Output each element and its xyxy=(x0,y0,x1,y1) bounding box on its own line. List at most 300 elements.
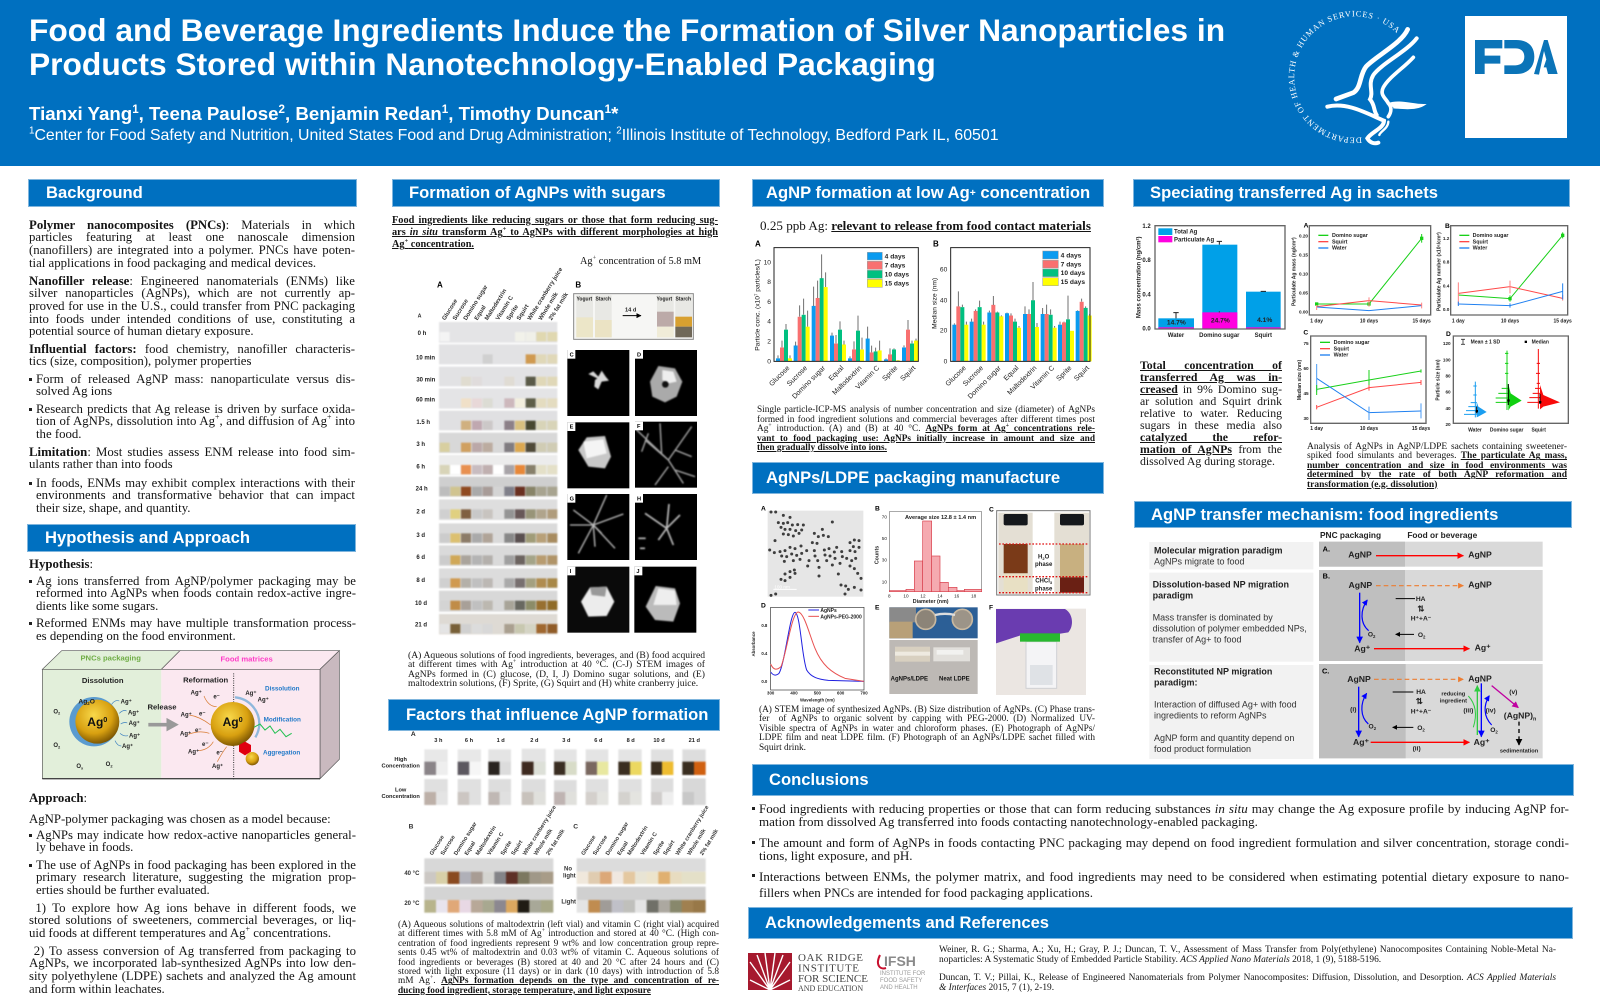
bullet: in foods: In foods, ENMs may exhibit complex interactions with their xyxy=(36,476,355,490)
bullet: conclusion 2: tions, light exposure, and pH. xyxy=(759,848,912,862)
panel F: sachet in gloved hand xyxy=(989,604,1086,695)
panel A labels: 21 d xyxy=(689,738,701,744)
panel A: column labels: White cranberry juice xyxy=(527,266,565,322)
bullet: conclusion 3: Interactions between ENMs, the polymer matrix, and food ingredients may need to be considered when estimating potential dietary exposure to nano- xyxy=(759,868,1569,884)
bar chart: mass concentration: 0.0 xyxy=(1142,326,1151,332)
panel A labels: 6 h xyxy=(465,738,474,744)
text: influential factors xyxy=(29,342,355,368)
figure: factors vial photos xyxy=(381,731,720,914)
text: polymer nanocomposites: particles featuring at least one nanoscale dimension xyxy=(29,230,355,244)
mechanism C: H⁺+A⁻ xyxy=(1411,709,1432,716)
panel B: yogurt and starch vials: Starch xyxy=(676,297,691,303)
panel A labels: 2 d xyxy=(530,738,539,744)
panel headings: Dissolution xyxy=(82,676,124,685)
mechanism C: 2 xyxy=(1374,726,1377,731)
chart A: particle concentration: Domino sugar xyxy=(791,364,828,401)
panel E: film extruder and film photos: AgNPs/LDPE xyxy=(891,677,928,683)
text: total concentration finding: relative to water. Reducing xyxy=(1140,406,1282,420)
caption: LDPE figure: LDPE film and neat LDPE film. (F) Photograph of an AgNPs/LDPE sachet filled with xyxy=(759,733,1095,743)
mechanism C: 2 xyxy=(1495,729,1498,734)
text: total concentration finding: sugars in these media also xyxy=(1140,418,1282,432)
dissolving Ag particle: Ag⁺ xyxy=(128,709,139,716)
icon: FDA logo xyxy=(1465,16,1567,138)
logos: HHS seal and FDA xyxy=(1288,10,1567,146)
text: total concentration finding: ar solution and Squirt drink xyxy=(1140,394,1282,408)
bar chart: mass concentration: Total Ag xyxy=(1174,230,1198,236)
line chart B: particulate Ag number: 0.0 xyxy=(1443,307,1450,312)
wordmark: Oak Ridge Institute: AND EDUCATION xyxy=(798,984,863,993)
heading: Hypothesis and Approach: Hypothesis and Approach xyxy=(45,528,250,547)
line chart C: median size: Water xyxy=(1334,353,1348,359)
STEM image F xyxy=(635,422,697,488)
paradigm B description xyxy=(1149,573,1313,662)
bullet: form of released mass: solved Ag ions xyxy=(36,384,112,398)
mechanism C: HA xyxy=(1416,689,1426,696)
panel headings xyxy=(80,654,273,712)
bullet: redox-active: ly behave in foods. xyxy=(36,840,133,854)
title xyxy=(29,12,1225,82)
STEM image E: E xyxy=(570,425,574,431)
bullet: conclusion 1 xyxy=(759,802,1569,828)
panels B and C column labels: Equal xyxy=(464,840,477,857)
panel A labels: Concentration xyxy=(381,764,420,770)
violin chart D: particle size: 60 xyxy=(1445,390,1451,395)
panel A labels: Concentration xyxy=(381,794,420,800)
caption: low concentration figure: Single particle-ICP-MS analysis of number concentration and size (diameter) of AgNPs xyxy=(757,405,1095,415)
dissolving Ag particle: O xyxy=(106,762,110,768)
panel D: UV-Vis spectra: 0.8 xyxy=(761,623,768,628)
chart A: particle concentration xyxy=(754,240,918,401)
arrow: release xyxy=(148,721,175,728)
panels B and C column labels: Whole milk xyxy=(687,828,708,857)
line chart C: median size: 10 days xyxy=(1360,426,1378,432)
text: total concentration finding: transferred Ag was in- xyxy=(1140,370,1282,384)
mechanism C: AgNP xyxy=(1347,674,1371,684)
text: formation summary: Ag+ concentration. xyxy=(392,238,474,250)
authors: Tianxi Yang1, Teena Paulose2, Benjamin Redan1, Timothy Duncan1* xyxy=(29,103,618,124)
STEM image J xyxy=(634,567,696,633)
panel A labels: High xyxy=(394,757,407,763)
caption: factors figure: centration of food ingredients represent 9 wt% and low concentration group repre- xyxy=(398,939,719,949)
chart B: median size: Equal xyxy=(1003,364,1021,382)
mechanism C: (iv) xyxy=(1486,708,1496,715)
chart B: median size: 7 days xyxy=(1061,261,1082,268)
chart A: particle concentration: Particle conc. (x10 xyxy=(755,296,762,351)
panels B and C column labels: 40 °C xyxy=(404,871,420,877)
panel C: phase transfer vials: phase xyxy=(1035,586,1053,592)
text: aim 2 xyxy=(29,944,356,996)
STEM image G xyxy=(567,494,629,560)
panels B and C column labels: Maltodextrin xyxy=(475,825,498,857)
panel A: column labels: Vitamin C xyxy=(495,295,515,322)
figure: AgNPs/LDPE manufacture panels xyxy=(751,506,1090,702)
bullet: redox-active: AgNPs may indicate how redox-active nanoparticles general- xyxy=(36,828,356,842)
panel B: size histogram: 14 xyxy=(937,593,943,598)
heading: Acknowledgements and References: Acknowledgements and References xyxy=(765,913,1049,932)
panel C: phase transfer vials: C xyxy=(989,506,994,513)
mechanism C: (ii) xyxy=(1413,746,1421,753)
references: Weiner, R. G.; Sharma, A.; Xu, H.; Gray, P. J.; Duncan, T. V., Assessment of Mass Transfer from Poly(ethylene) Nanocomposites Containing Noble-Metal Na- xyxy=(939,945,1556,955)
text: total concentration finding: creased in 9% Domino sug- xyxy=(1140,382,1282,396)
caption: formation figure: (A) Aqueous solutions of food ingredients, beverages, and (B) food acquired xyxy=(408,650,705,661)
panel D: UV-Vis spectra: AgNPs xyxy=(820,608,837,614)
chart A: particle concentration: 6 xyxy=(767,299,771,306)
line chart C: median size: 30 xyxy=(1303,416,1309,421)
heading: Background: Background xyxy=(46,183,143,202)
line chart B: particulate Ag number: 0.8 xyxy=(1443,259,1450,264)
affiliations: 1Center for Food Safety and Nutrition, United States Food and Drug Administration; 2Illinois Institute of Technology, Bedford Park IL, 60501 xyxy=(29,126,999,144)
reforming Ag particle: Ag⁺ xyxy=(212,763,223,770)
panel A high concentration vials xyxy=(424,749,706,775)
mechanism C: O xyxy=(1417,725,1422,732)
dissolving Ag particle xyxy=(53,697,140,770)
bar chart: mass concentration: Domino sugar xyxy=(1199,333,1240,339)
wordmark: Oak Ridge Institute: FOR SCIENCE xyxy=(798,973,868,985)
chart A: particle concentration: 15 days xyxy=(885,281,909,288)
bullet: research literature: primary research literature, suggesting the migration prop- xyxy=(36,870,356,884)
reforming Ag particle: Ag⁺ xyxy=(258,696,269,703)
mechanism C: O xyxy=(1490,727,1495,734)
STEM image C xyxy=(567,350,629,416)
panels B and C column labels: Glucose xyxy=(581,835,598,857)
panel A labels: Low xyxy=(395,787,407,793)
panels B and C column labels: Whole milk xyxy=(533,828,555,857)
mechanism B: AgNP xyxy=(1468,579,1492,589)
panel B: size histogram: B xyxy=(875,506,880,513)
paradigm C description: Reconstituted NP migration xyxy=(1154,666,1272,676)
bar chart: mass concentration xyxy=(1136,224,1285,339)
panel B: size histogram: 12 xyxy=(920,593,926,598)
chart B: median size: Squirt xyxy=(1073,365,1091,383)
panel A: vial rows xyxy=(439,322,557,634)
dissolving Ag particle: O xyxy=(90,699,95,706)
chart B: median size: 0 xyxy=(944,358,948,365)
chart A: particle concentration: 10 xyxy=(764,259,771,266)
reforming Ag particle: Dissolution xyxy=(265,685,300,692)
references: noparticles: A Systematic Study of Embedded Particle Stability. ACS Applied Nano Materials 2018, 1 (9), 5188-5196. xyxy=(939,955,1381,965)
panels B and C column labels: Domino sugar xyxy=(453,821,479,857)
line chart A: particulate Ag mass: 1 day xyxy=(1310,318,1323,324)
panel D: UV-Vis spectra: 300 xyxy=(767,690,775,695)
text: aim 1: stored solutions of sweeteners, commercial beverages, or liq- xyxy=(29,913,356,927)
bar chart: mass concentration: Squirt xyxy=(1255,333,1272,339)
panel A labels: 6 d xyxy=(594,738,603,744)
line chart A: particulate Ag mass: Particulate Ag mass (ng/cm²) xyxy=(1291,237,1297,306)
mechanism B: Ag⁺ xyxy=(1475,643,1491,653)
chart A: particle concentration: Sprite xyxy=(882,365,899,383)
violin chart D: particle size xyxy=(1435,331,1568,433)
dissolving Ag particle: 2 xyxy=(87,701,90,706)
chart B: median size: Sucrose xyxy=(962,365,985,388)
wordmark: IFSH xyxy=(878,953,926,991)
text: concentration label: Ag+ concentration of 5.8 mM xyxy=(580,255,701,267)
text: hypothesis label: Hypothesis: xyxy=(29,557,93,571)
axes A xyxy=(774,248,918,361)
heading: Factors that influence AgNP formation: Factors that influence AgNP formation xyxy=(406,705,708,724)
panel B: size histogram: 70 xyxy=(882,514,887,519)
violin chart D: particle size: Water xyxy=(1468,427,1482,433)
panel A: time labels: 6 d xyxy=(416,555,425,561)
line chart C: median size: 1 day xyxy=(1310,426,1323,432)
mechanism B: O xyxy=(1418,632,1423,639)
line chart C: median size: 15 days xyxy=(1412,426,1430,432)
caption: sachet figure: number concentration and size in food environments was xyxy=(1307,461,1567,471)
heading: AgNPs/LDPE packaging manufacture: AgNPs/LDPE packaging manufacture xyxy=(766,468,1060,487)
panels B and C column labels: 20 °C xyxy=(404,901,420,907)
reforming Ag particle: Modification xyxy=(264,717,301,724)
line chart C: median size: C xyxy=(1303,330,1308,337)
mechanism A: A. xyxy=(1323,545,1330,554)
panel A labels: 10 d xyxy=(653,738,665,744)
chart B: median size: 20 xyxy=(940,328,948,335)
chart A: particle concentration: 4 xyxy=(767,319,771,326)
line chart A: particulate Ag mass: 0.10 xyxy=(1299,272,1308,277)
column headings: Food or beverage xyxy=(1407,530,1478,540)
panel A: STEM image of AgNPs: A xyxy=(761,506,766,513)
chart A: particle concentration: Sucrose xyxy=(786,365,809,388)
mechanism C: ⇅ xyxy=(1416,696,1424,706)
mechanism A: AgNP xyxy=(1468,550,1492,560)
panel B: size histogram: 18 xyxy=(971,593,977,598)
mechanism C: sedimentation xyxy=(1500,748,1539,754)
paradigm B description: Mass transfer is dominated by xyxy=(1153,613,1273,623)
paradigm A description xyxy=(1149,542,1313,569)
heading: AgNP formation at low Ag+ concentration xyxy=(752,179,1104,207)
text: nanofiller release: potential source of human dietary exposure. xyxy=(29,324,254,338)
legend B xyxy=(1043,251,1058,286)
text: aim 1: 1) To explore how Ag ions behave in different foods, we xyxy=(35,901,356,915)
caption: LDPE figure: Visible spectra of AgNPs in water and chloroform phases. (E) Photograph of AgNPs/ xyxy=(759,724,1095,734)
chart A: particle concentration: particles/L) xyxy=(755,259,762,294)
panel C: phase transfer vials: 2 xyxy=(1042,556,1045,561)
mechanism B: O xyxy=(1368,632,1373,639)
panel A: time labels: 10 min xyxy=(416,355,435,361)
reforming Ag particle: Aggregation xyxy=(263,750,300,757)
mechanism C: O xyxy=(1369,724,1374,731)
caption: formation figure: maltodextrin solutions, (F) Sprite, (G) Squirt and (H) white cranberry juice. xyxy=(408,678,698,689)
caption: factors figure: ducing food ingredient, storage temperature, and light exposure xyxy=(398,986,651,996)
line chart A: particulate Ag mass: 0.15 xyxy=(1299,253,1308,258)
panel A: time labels: 2 d xyxy=(416,510,425,516)
line chart B: particulate Ag number xyxy=(1436,223,1572,324)
panel headings: Reformation xyxy=(183,675,229,684)
paradigm B description: paradigm xyxy=(1153,591,1193,601)
wordmark: IFSH: IFSH xyxy=(884,953,916,969)
dissolving Ag particle: Ag⁺ xyxy=(122,743,133,750)
panel D: UV-Vis spectra: Absorbance xyxy=(751,631,756,657)
figure: vial time series and STEM images xyxy=(415,266,697,635)
caption: low concentration figure: vant to food packaging use: AgNPs initially increase in amount and size and xyxy=(757,434,1095,444)
caption: sachet figure: transformation (e.g. dissolution) xyxy=(1307,480,1437,490)
heading: Conclusions: Conclusions xyxy=(769,770,869,789)
panel A: time labels xyxy=(415,331,436,628)
panel B: size histogram xyxy=(875,506,982,605)
mechanism C: (iii) xyxy=(1463,708,1473,715)
panel A: column labels: Sprite xyxy=(506,304,520,322)
panel B: size histogram: 8 xyxy=(888,593,891,598)
caption: factors figure: at different times with 5.8 mM of Ag+ introduction and stored at 40 °C. (High con- xyxy=(398,928,719,939)
panels B and C column labels: Glucose xyxy=(429,835,446,857)
panels B and C column labels: C xyxy=(573,824,578,831)
chart B: median size: Sprite xyxy=(1056,365,1073,383)
panel D: UV-Vis spectra: 400 xyxy=(790,690,798,695)
caption: formation figure xyxy=(408,650,705,689)
wordmark: Oak Ridge Institute xyxy=(798,952,868,993)
dissolving Ag particle: x xyxy=(81,765,84,770)
dissolving Ag particle: O xyxy=(53,709,58,715)
panels B and C column labels: 2% fat milk xyxy=(546,828,567,857)
bullet: in foods xyxy=(36,477,355,515)
line chart A: particulate Ag mass xyxy=(1291,222,1431,324)
caption: LDPE figure: Squirt drink. xyxy=(759,743,806,753)
panel A: time labels: 3 d xyxy=(416,533,425,539)
caption: formation figure: AgNPs formed in (C) glucose, (D, I, J) Domino sugar solutions, and (E) xyxy=(408,669,705,680)
reforming Ag particle: e⁻ xyxy=(195,728,202,734)
panels B and C column labels: Domino sugar xyxy=(605,821,631,857)
wordmark: IFSH: INSTITUTE FOR xyxy=(880,971,926,977)
panels B and C column labels: White cranberry juice xyxy=(522,805,558,857)
panel A: column labels: Squirt xyxy=(516,304,531,322)
bullet: reformed ENMs: Reformed ENMs may have multiple transformation process- xyxy=(36,616,356,630)
bullet: research literature: erties should be further evaluated. xyxy=(36,883,210,897)
chart A: particle concentration: Squirt xyxy=(900,365,917,383)
text: aim 1 xyxy=(29,901,356,940)
reforming Ag particle: 0 xyxy=(239,715,243,724)
panels B and C column labels: Sprite xyxy=(500,840,514,857)
bullet: Ag ions transferred: Ag ions transferred from AgNP/polymer packaging may be xyxy=(36,574,356,588)
chart A: particle concentration: 2 xyxy=(767,338,771,345)
heading: Speciating transferred Ag in sachets: Speciating transferred Ag in sachets xyxy=(1150,183,1438,202)
box faces xyxy=(42,651,339,780)
caption: formation figure: at different times with Ag+ introduction at 40 °C. (C-J) STEM images of xyxy=(408,659,705,670)
dissolving Ag particle: Ag⁺ xyxy=(129,720,140,727)
line chart B: particulate Ag number: 1 day xyxy=(1452,318,1465,324)
reforming Ag particle: Ag⁺ xyxy=(180,731,191,738)
violin chart D: particle size: 100 xyxy=(1443,357,1451,362)
line chart B: particulate Ag number: 10 days xyxy=(1501,318,1519,324)
violin chart D: particle size: 40 xyxy=(1445,406,1451,411)
line chart B: particulate Ag number: 15 days xyxy=(1553,318,1572,324)
line chart C: median size: Domino sugar xyxy=(1334,340,1369,346)
panel D: UV-Vis spectra: 0.0 xyxy=(761,679,768,684)
heading: AgNPs/LDPE packaging manufacture xyxy=(752,462,1104,494)
mechanism C: (v) xyxy=(1509,689,1517,696)
mechanism C: (i) xyxy=(1350,706,1356,713)
panel C: phase transfer vials xyxy=(989,506,1090,595)
panel A: time labels: 3 h xyxy=(416,442,425,448)
panel B: yogurt and starch vials: B xyxy=(575,280,581,289)
mechanism B: Ag⁺ xyxy=(1354,643,1371,653)
text: polymer nanocomposites: Polymer nanocomposites (PNCs): Materials in which xyxy=(29,218,355,232)
chart A: particle concentration: 0 xyxy=(767,358,771,365)
bullet: reformed ENMs: es depending on the food environment. xyxy=(36,629,236,643)
bullet: conclusion 3 xyxy=(759,868,1569,900)
caption: LDPE figure: fer of AgNPs to organic solvent by capping with PEG-2000. (D) Normalized UV- xyxy=(759,714,1095,724)
text: total concentration finding: Total concentration of xyxy=(1140,358,1282,372)
panels B and C column labels: Vitamin C xyxy=(640,832,659,857)
mechanism C: ingredient xyxy=(1440,698,1467,704)
caption: sachet figure: spiked food simulants and beverages. The particulate Ag mass, xyxy=(1307,451,1567,461)
STEM image F: F xyxy=(637,424,641,430)
panels B and C column labels: Sucrose xyxy=(592,835,609,857)
panel B: yogurt and starch vials: Yogurt xyxy=(576,297,593,303)
bullet: research predicts: the food. xyxy=(36,427,82,441)
chart B: median size: Vitamin C xyxy=(1030,365,1056,391)
mechanism C: n xyxy=(1533,716,1536,722)
wordmark: Oak Ridge Institute: OAK RIDGE xyxy=(798,952,864,964)
panels B and C column labels: Squirt xyxy=(511,840,524,857)
diagram: release and reformation box xyxy=(42,650,340,780)
bar chart: mass concentration: 4.1% xyxy=(1257,317,1272,324)
panel B: size histogram: Diameter (nm) xyxy=(913,599,949,605)
text: total concentration finding: mation of AgNPs from the xyxy=(1140,442,1282,456)
line chart C: median size: 75 xyxy=(1303,341,1309,346)
bullet: Ag ions transferred: dients like some sugars. xyxy=(36,599,158,613)
panel C: phase transfer vials: H xyxy=(1038,555,1042,561)
axes B xyxy=(951,248,1090,361)
panel A: time labels: 30 min xyxy=(416,377,436,383)
dissolving Ag particle: 2 xyxy=(58,744,61,749)
references xyxy=(939,945,1556,993)
text: nanofiller release: proved for use in the U.S., could transfer from PNC packaging xyxy=(29,299,355,313)
dissolving Ag particle: Ag xyxy=(87,715,103,729)
line chart A: particulate Ag mass: 15 days xyxy=(1412,318,1431,324)
line chart A: particulate Ag mass: Domino sugar xyxy=(1332,233,1368,239)
heading: Conclusions xyxy=(752,764,1574,796)
text: polymer nanocomposites: tial applications in food packaging and medical devices. xyxy=(29,256,316,270)
text: limitation: Limitation: Most studies assess ENM release into food sim- xyxy=(29,445,355,459)
violin chart D: particle size: 80 xyxy=(1445,373,1451,378)
violin chart D: particle size: Median xyxy=(1532,340,1549,346)
panels B and C column labels: Vitamin C xyxy=(487,832,505,857)
chart B: median size xyxy=(931,240,1092,401)
dissolving Ag particle: O xyxy=(53,743,58,749)
panel B: size histogram: 10 xyxy=(882,580,887,585)
panel B: size histogram: 16 xyxy=(954,593,960,598)
panel A: column labels: Sucrose xyxy=(452,298,470,322)
paradigm C description: ingredients to reform AgNPs xyxy=(1154,711,1267,721)
line chart A: particulate Ag mass: 10 days xyxy=(1360,318,1378,324)
mechanism C: C. xyxy=(1322,666,1329,675)
column headings: PNC packaging xyxy=(1320,530,1381,540)
STEM image I xyxy=(567,567,629,633)
chart B: median size: Median size (nm) xyxy=(931,278,938,329)
heading: Acknowledgements and References xyxy=(748,907,1573,939)
bar chart: mass concentration: 0.4 xyxy=(1142,292,1151,298)
panels B and C column labels: 2% fat milk xyxy=(699,828,720,857)
text: influential factors: Influential factors: food chemistry, nanofiller characteris- xyxy=(29,342,355,356)
chart A: particle concentration: 7 days xyxy=(885,263,906,270)
chart A: particle concentration: 4 days xyxy=(885,253,906,260)
reforming Ag particle: e⁻ xyxy=(216,751,223,757)
panel C: phase transfer vials: phase xyxy=(1035,562,1053,568)
text: total concentration finding xyxy=(1140,358,1282,468)
chart B: median size: Domino sugar xyxy=(967,364,1003,401)
text: nanofiller release: into foods under intended conditions of use, constituting a xyxy=(29,312,355,326)
STEM image G: G xyxy=(570,496,575,502)
panel A: time labels: 1.5 h xyxy=(416,420,430,426)
caption: low concentration figure: Ag+ introduction. (A) and (B) at 40 °C. AgNPs form at Ag+ concentrations rele- xyxy=(757,423,1095,434)
violin chart D: particle size: Domino sugar xyxy=(1490,427,1524,433)
paradigm C description: food product formulation xyxy=(1154,744,1251,754)
reforming Ag particle: Ag⁺ xyxy=(245,690,257,697)
panel B: yogurt and starch vials: 14 d xyxy=(625,307,637,313)
panel A: column labels: Whole milk xyxy=(538,291,560,322)
text: polymer nanocomposites xyxy=(29,218,355,270)
panel D: UV-Vis spectra: 0.4 xyxy=(761,651,768,656)
caption: low concentration figure: then gradually dissolve into ions. xyxy=(757,443,887,453)
chart B: median size: 40 xyxy=(940,297,948,304)
